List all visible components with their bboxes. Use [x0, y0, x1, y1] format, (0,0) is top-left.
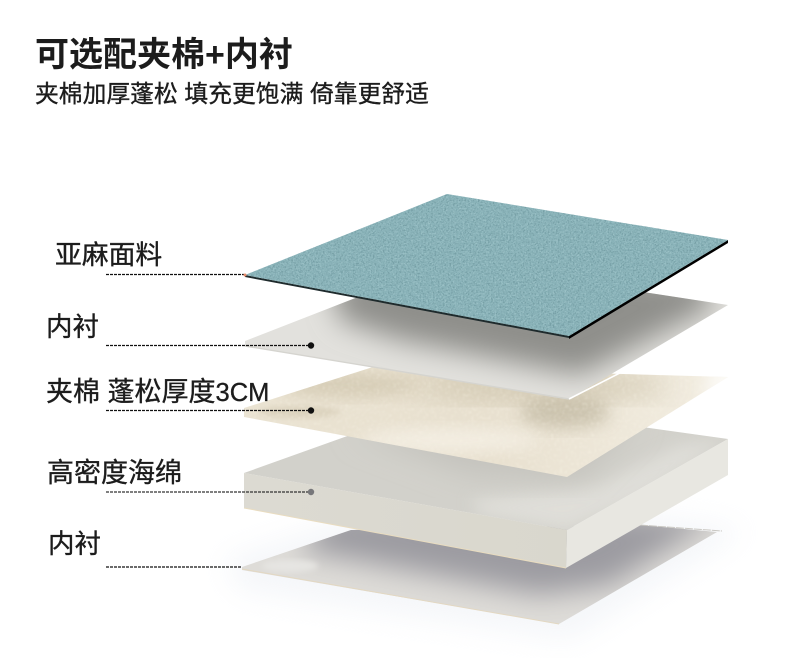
label: lower liner: 内衬 [48, 529, 101, 559]
label: high-density foam [47, 458, 314, 495]
label: upper liner [46, 312, 314, 349]
label: quilted padding [46, 377, 314, 414]
layer: quilted padding [244, 368, 728, 477]
label: linen fabric [55, 240, 246, 276]
label: linen fabric: 亚麻面料 [55, 240, 162, 270]
subtitle: 夹棉加厚蓬松 填充更饱满 倚靠更舒适 [35, 81, 429, 108]
label: quilted padding: 夹棉 蓬松厚度3CM [46, 377, 269, 407]
layer: high-density foam [244, 428, 728, 568]
layer: lower liner [242, 524, 722, 626]
label: upper liner: 内衬 [46, 312, 99, 342]
title: 可选配夹棉+内衬 [35, 36, 293, 74]
layer: linen fabric [240, 190, 735, 340]
layer: upper liner [245, 292, 728, 400]
label: high-density foam: 高密度海绵 [47, 458, 182, 488]
